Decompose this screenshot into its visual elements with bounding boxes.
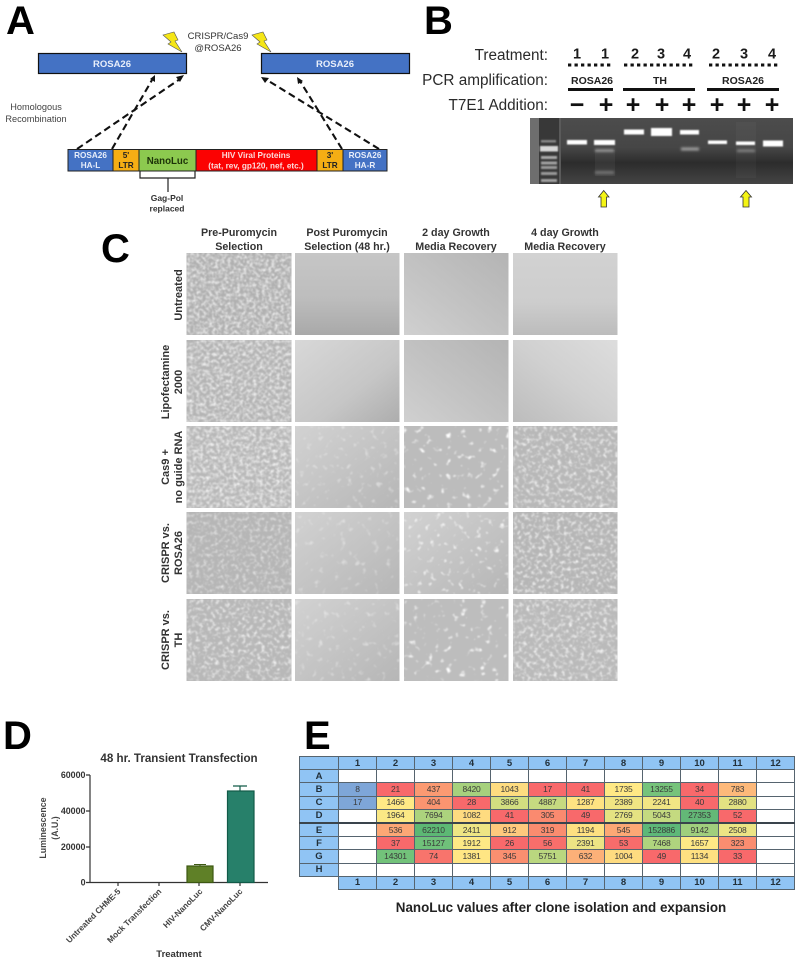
T7E1 plus and minus signs: + [737, 91, 751, 119]
construct: 3' LTR segment [317, 150, 343, 171]
heat map table: 10 [694, 877, 705, 888]
heat map table: 6 [545, 758, 550, 769]
treatment numbers: 2 [631, 46, 639, 62]
micrograph row: Untreated [186, 253, 618, 335]
y tick labels: 60000 [61, 770, 86, 780]
row labels: TH [173, 633, 185, 647]
heat map table: 41 [505, 810, 514, 820]
T7E1 plus and minus signs: + [626, 91, 640, 119]
icon: yellow arrow lane 7 [740, 190, 752, 207]
row labels [160, 269, 185, 670]
Gag-Pol replaced label: replaced [150, 204, 184, 214]
right ROSA26 locus bar [262, 54, 410, 74]
heat map table: D [316, 810, 322, 821]
row labels: 2000 [173, 370, 185, 394]
heat map table: 1134 [691, 851, 708, 861]
T7E1 plus and minus signs: + [765, 91, 779, 119]
heat map table: 1912 [462, 838, 481, 848]
y axis title: luminescence: Luminescence [38, 797, 48, 859]
heat map table [299, 756, 795, 890]
heat map table: 74 [429, 851, 438, 861]
bar: CMV-NanoLuc [228, 786, 254, 882]
y axis title: units: (A.U.) [50, 816, 60, 840]
heat map table: 7468 [652, 838, 671, 848]
construct: 3' LTR segment: 3' [327, 151, 333, 160]
heat map table: 437 [427, 784, 440, 794]
panel letter B: B [424, 0, 453, 43]
heat map table: 305 [541, 810, 554, 820]
heat map table: 2391 [576, 838, 595, 848]
y tick labels: 0 [81, 878, 86, 888]
column headings: Selection (48 hr.) [304, 241, 390, 253]
axes and ticks [86, 775, 268, 886]
column headings: Selection [215, 241, 263, 253]
construct: 5' LTR segment [113, 150, 139, 171]
heat map table: 545 [617, 825, 630, 835]
heat map table: 49 [581, 810, 590, 820]
heat map table: 49 [657, 851, 666, 861]
construct: NanoLuc segment: NanoLuc [147, 156, 189, 167]
heat map table: 152886 [648, 825, 675, 835]
heat map table: 37 [391, 838, 400, 848]
row labels: CRISPR vs. [160, 523, 172, 583]
construct: HA-L segment [68, 150, 113, 171]
treatment numbers: 4 [683, 46, 691, 62]
heat map table: 1 [355, 758, 360, 769]
heat map table: 11 [732, 877, 743, 888]
ladder bands [540, 140, 558, 182]
T7E1 plus and minus signs: + [682, 91, 696, 119]
heat map table: 62210 [422, 825, 445, 835]
treatment numbers: 4 [768, 46, 776, 62]
heat map table: 404 [427, 797, 440, 807]
construct: HA-R segment: ROSA26 [349, 151, 381, 160]
heat map table: 345 [503, 851, 516, 861]
heat map table: 1657 [690, 838, 709, 848]
construct: HIV viral proteins segment [196, 150, 317, 171]
heat map table: 26 [505, 838, 514, 848]
PCR target labels: ROSA26 [571, 75, 613, 87]
heat map table: 1466 [386, 797, 405, 807]
heat map table: E [316, 825, 322, 836]
x axis title: Treatment [156, 949, 203, 960]
construct: HA-R segment [343, 150, 387, 171]
heat map table: 5 [507, 758, 512, 769]
heat map table: 8 [621, 758, 626, 769]
heat map table: 7 [583, 758, 588, 769]
homologous recombination label: Recombination [5, 114, 67, 124]
heat map table: 2411 [463, 825, 480, 835]
T7E1 plus and minus signs: + [710, 91, 724, 119]
column headings: Media Recovery [415, 241, 497, 253]
heat map table: 319 [541, 825, 554, 835]
PCR target labels [571, 75, 764, 87]
heat map table: 1964 [386, 810, 405, 820]
heat map table: 12 [770, 758, 781, 769]
treatment numbers: 3 [740, 46, 748, 62]
y tick labels [61, 770, 86, 888]
heat map table: 632 [579, 851, 592, 861]
chart title: 48 hr. Transient Transfection [100, 752, 258, 765]
construct: 3' LTR segment: LTR [322, 161, 338, 170]
heat map table: C [316, 797, 322, 808]
construct: HA-R segment: HA-R [355, 161, 375, 170]
heat map table: 1287 [576, 797, 595, 807]
panel D: bar chart [3, 714, 268, 960]
row labels: Treatment: [475, 47, 548, 64]
heat map table: 53 [619, 838, 628, 848]
treatment numbers: 2 [712, 46, 720, 62]
heat map table: 2769 [614, 810, 633, 820]
heat map table: 536 [389, 825, 402, 835]
heat map table: 5751 [538, 851, 557, 861]
heat map table: 9142 [690, 825, 709, 835]
heat map table: 11 [732, 758, 743, 769]
row labels: no guide RNA [173, 431, 185, 503]
heat map table: 2 [393, 877, 398, 888]
heat map table: 4 [469, 877, 474, 888]
icon: right lightning bolt [252, 32, 271, 52]
heat map table: 7694 [424, 810, 443, 820]
heat map table: 5 [507, 877, 512, 888]
heat map table: B [316, 784, 322, 795]
right ROSA26 locus bar: ROSA26 [316, 59, 354, 70]
heat map table: 1 [355, 877, 360, 888]
heat map table: 14301 [384, 851, 407, 861]
left ROSA26 locus bar: ROSA26 [93, 59, 131, 70]
panel E: plate heat map [299, 714, 795, 915]
heat map table: 2241 [652, 797, 671, 807]
x tick labels: Untreated CHME-5 [64, 886, 123, 945]
heat map table: 3 [431, 877, 436, 888]
row labels: Cas9 + [160, 449, 172, 485]
micrograph row: CRISPR vs TH [186, 599, 618, 681]
treatment numbers: 1 [601, 46, 609, 62]
heat map table: 783 [731, 784, 744, 794]
construct: HIV viral proteins segment: HIV Viral Proteins [222, 151, 290, 160]
heat map table: 8 [621, 877, 626, 888]
sample bands [567, 128, 783, 146]
heat map table: 1043 [500, 784, 519, 794]
heat map table: 1004 [614, 851, 633, 861]
heat map table: 912 [503, 825, 516, 835]
treatment numbers: 3 [657, 46, 665, 62]
construct: NanoLuc segment [139, 150, 196, 171]
Gag-Pol replaced label: Gag-Pol [151, 193, 183, 203]
heat map table: 8420 [462, 784, 481, 794]
T7E1 plus and minus signs: + [655, 91, 669, 119]
heat map table: 12 [770, 877, 781, 888]
x tick labels: Mock Transfection [105, 886, 163, 945]
row labels [422, 47, 548, 114]
treatment numbers: 1 [573, 46, 581, 62]
homologous recombination label: Homologous [10, 102, 62, 112]
y tick labels: 20000 [61, 842, 86, 852]
heat map table: 1082 [462, 810, 481, 820]
dashed arrows to the ROSA26 loci [77, 79, 379, 149]
heat map table: A [316, 771, 322, 782]
row labels: Lipofectamine [160, 345, 172, 419]
column headings: Pre-Puromycin [201, 227, 277, 239]
heat map table: 6 [545, 877, 550, 888]
T7E1 plus and minus signs: − [570, 91, 584, 119]
row labels: PCR amplification: [422, 72, 548, 89]
heat map table: 4 [469, 758, 474, 769]
icon: yellow arrow lane 2 [598, 190, 609, 207]
PCR target underlines [568, 88, 779, 91]
T7E1 plus and minus signs [570, 91, 779, 119]
T7E1 plus and minus signs: + [599, 91, 613, 119]
panel B: T7E1 gel [422, 0, 793, 207]
construct: HA-L segment: ROSA26 [74, 151, 107, 160]
heat map table: 2508 [728, 825, 747, 835]
heat map table: 17 [353, 797, 362, 807]
bar: HIV-NanoLuc [187, 864, 213, 882]
PCR target labels: ROSA26 [722, 75, 764, 87]
construct: HIV viral proteins segment: (tat, rev, gp120, nef, etc.) [208, 162, 304, 170]
heat map table: 1381 [462, 851, 481, 861]
row labels: ROSA26 [173, 531, 185, 575]
heat map table: 56 [543, 838, 552, 848]
Gag-Pol bracket [140, 171, 195, 192]
panel letter E: E [304, 714, 331, 758]
heat map table: 8 [355, 784, 360, 794]
panel C: microscopy grid [101, 227, 618, 681]
heat map table: 1735 [614, 784, 633, 794]
heat map table: 1194 [577, 825, 594, 835]
heat map table: 4887 [538, 797, 557, 807]
heat map caption: NanoLuc values after clone isolation and expansion [396, 900, 726, 915]
construct: 5' LTR segment: LTR [118, 161, 134, 170]
row labels: T7E1 Addition: [448, 97, 548, 114]
heat map table: F [316, 838, 322, 849]
y tick labels: 40000 [61, 806, 86, 816]
heat map table: 21 [391, 784, 400, 794]
icon: left lightning bolt [163, 32, 182, 52]
column headings: Post Puromycin [306, 227, 388, 239]
panel letter D: D [3, 714, 32, 758]
treatment numbers [573, 46, 776, 62]
construct: HA-L segment: HA-L [81, 161, 100, 170]
CRISPR/Cas9 label: @ROSA26 [194, 43, 242, 54]
heat map table: 3866 [500, 797, 519, 807]
row labels: Untreated [173, 269, 185, 321]
micrograph row: CRISPR vs ROSA26 [186, 512, 618, 594]
x tick labels: HIV-NanoLuc [161, 886, 205, 930]
gel image [530, 118, 793, 184]
column headings: Media Recovery [524, 241, 606, 253]
heat map table: 9 [659, 877, 664, 888]
cleavage product bands [595, 148, 755, 174]
heat map table: 52 [733, 810, 742, 820]
heat map table: 28 [467, 797, 476, 807]
heat map table: 7 [583, 877, 588, 888]
heat map table: 13255 [650, 784, 673, 794]
heat map table: 2389 [614, 797, 633, 807]
heat map table: H [316, 864, 322, 875]
column headings: 2 day Growth [422, 227, 490, 239]
heat map table: 10 [694, 758, 705, 769]
heat map table: 5043 [652, 810, 671, 820]
column headings [201, 227, 606, 253]
heat map table: G [315, 851, 323, 862]
heat map table: 34 [695, 784, 704, 794]
micrograph row: Cas9 no guide RNA [186, 426, 618, 508]
panel letter A: A [6, 0, 35, 43]
heat map table: 41 [581, 784, 590, 794]
heat map table: 2 [393, 758, 398, 769]
CRISPR/Cas9 label: CRISPR/Cas9 [188, 31, 248, 42]
x tick labels: CMV-NanoLuc [198, 886, 245, 933]
heat map table: 33 [733, 851, 742, 861]
heat map table: 323 [731, 838, 744, 848]
PCR target labels: TH [653, 75, 667, 87]
dotted separators [568, 64, 780, 66]
row labels: CRISPR vs. [160, 610, 172, 670]
heat map table: 17 [543, 784, 552, 794]
construct: 5' LTR segment: 5' [123, 151, 129, 160]
heat map table: 15127 [422, 838, 445, 848]
panel A: construct diagram [5, 0, 410, 214]
left ROSA26 locus bar [38, 54, 186, 74]
heat map table: 9 [659, 758, 664, 769]
panel letter C: C [101, 227, 130, 271]
x tick labels [64, 886, 245, 945]
column headings: 4 day Growth [531, 227, 599, 239]
heat map table: 27353 [688, 810, 711, 820]
arrowheads [150, 75, 303, 84]
heat map table: 40 [695, 797, 704, 807]
heat map table: 2880 [728, 797, 747, 807]
micrograph row: Lipofectamine 2000 [186, 340, 618, 422]
heat map table: 3 [431, 758, 436, 769]
